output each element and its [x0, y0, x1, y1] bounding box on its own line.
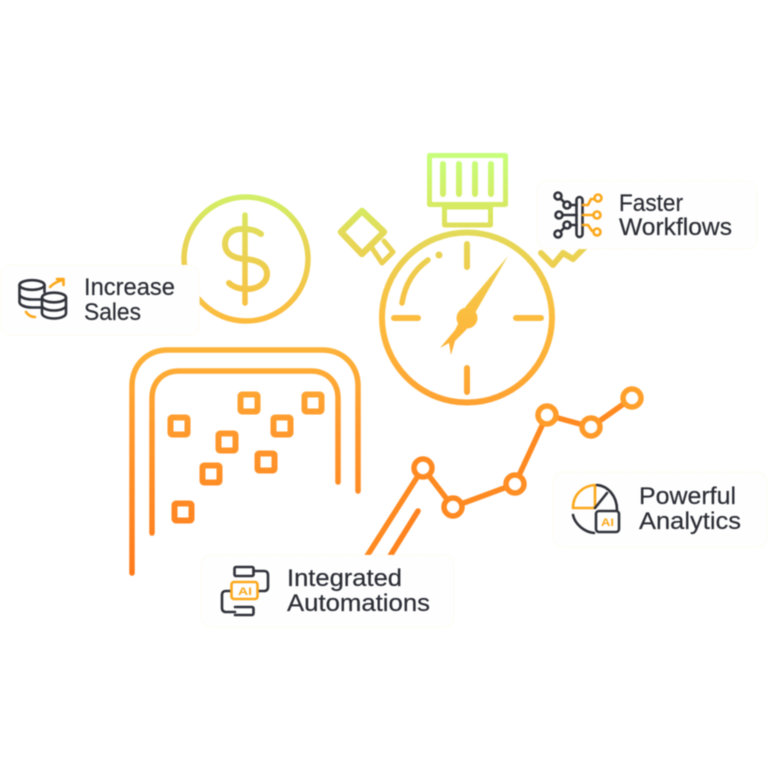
stopwatch arc and dot: [402, 252, 442, 303]
label: Faster Workflows: [619, 190, 732, 241]
label: Integrated Automations: Automations: [287, 590, 430, 617]
line chart: [367, 389, 641, 556]
data squares: [170, 394, 322, 520]
label: Increase Sales: Sales: [84, 299, 141, 326]
stopwatch crown: [430, 156, 506, 225]
icon: outer frame and inner frame: [132, 350, 358, 573]
card: Integrated Automations: [201, 555, 454, 627]
icon: coins: [20, 279, 66, 318]
stopwatch ticks: [394, 244, 541, 392]
label: Increase Sales: [84, 274, 175, 326]
icon: analytics pie: AI: [601, 517, 614, 529]
label: Integrated Automations: [287, 565, 430, 617]
label: Integrated Automations: Integrated: [287, 565, 402, 592]
label: Powerful Analytics: [639, 483, 741, 535]
icon: AI automation: [222, 567, 268, 615]
stopwatch right button: [541, 246, 586, 265]
icon: stopwatch: [341, 156, 586, 402]
card: Powerful Analytics: [553, 472, 767, 547]
icon: dollar coin: [184, 197, 308, 321]
stopwatch dial: [382, 232, 552, 402]
label: Powerful Analytics: Analytics: [639, 508, 741, 535]
icon: AI automation: AI: [238, 586, 252, 598]
label: Faster Workflows: Faster: [619, 190, 683, 217]
stopwatch hands: [440, 256, 508, 355]
label: Increase Sales: Increase: [84, 274, 175, 301]
icon: analytics pie: [573, 485, 619, 533]
card: Faster Workflows: [537, 181, 757, 249]
icon: workflow: [554, 192, 602, 238]
label: Powerful Analytics: Powerful: [639, 483, 736, 510]
card: Increase Sales: [0, 265, 200, 335]
stopwatch left button: [341, 211, 393, 263]
label: Faster Workflows: Workflows: [619, 214, 732, 241]
